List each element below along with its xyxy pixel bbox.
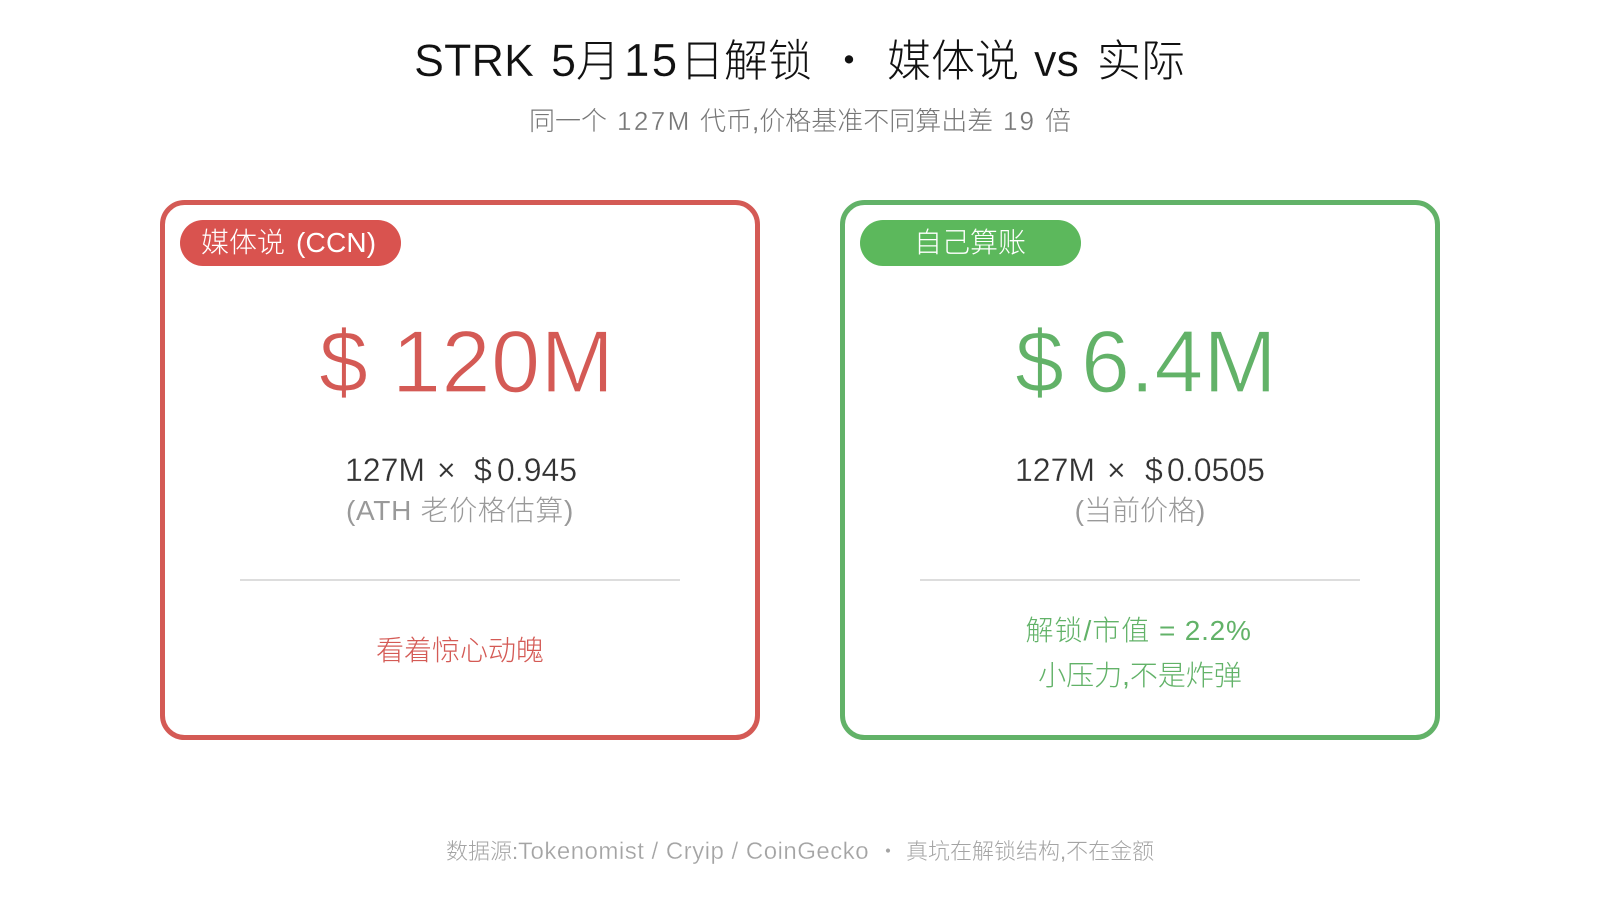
- formula note: own calculation: (当前价格): [1075, 495, 1205, 526]
- panel: media claim: [162, 202, 758, 738]
- subtitle: 同一个: [529, 106, 607, 136]
- title: STRK: [414, 35, 534, 86]
- subtitle: 127M: [617, 106, 692, 136]
- badge: media claim: 媒体说: [201, 227, 285, 258]
- title: 实际: [1097, 37, 1185, 86]
- formula: media claim: ×: [437, 452, 456, 488]
- badge: own calculation: 自己算账: [914, 227, 1026, 258]
- footer source note: Tokenomist / Cryip / CoinGecko: [518, 838, 869, 865]
- footer source note: 数据源:: [446, 839, 518, 864]
- formula: own calculation: ×: [1107, 452, 1126, 488]
- subtitle: 代币,价格基准不同算出差: [700, 106, 993, 136]
- formula: own calculation: 0.0505: [1167, 452, 1265, 488]
- subtitle: 19: [1003, 106, 1036, 136]
- verdict: own calculation: 小压力,不是炸弹: [1038, 660, 1242, 691]
- big number: 6.4M: $: [1015, 312, 1064, 411]
- title: 月: [576, 37, 620, 86]
- big number: 120M: 120M: [392, 312, 615, 411]
- formula: media claim: 127M: [345, 452, 425, 488]
- title: 媒体说: [887, 37, 1019, 86]
- verdict: own calculation: 解锁/市值: [1026, 615, 1150, 646]
- panel border: media claim: [162, 202, 758, 738]
- badge: own calculation: [860, 220, 1081, 266]
- footer source note: ・: [877, 839, 899, 864]
- big number: 6.4M: 6.4M: [1081, 312, 1277, 411]
- badge: media claim: (CCN): [296, 227, 376, 258]
- formula: own calculation: 127M: [1015, 452, 1095, 488]
- panel: own calculation: [842, 202, 1438, 738]
- big number: 120M: $: [319, 312, 368, 411]
- formula: media claim: 0.945: [497, 452, 577, 488]
- badge: media claim: [180, 220, 401, 266]
- verdict: media claim: 看着惊心动魄: [376, 635, 544, 666]
- footer source note: 真坑在解锁结构,不在金额: [906, 839, 1154, 864]
- title: 日解锁: [680, 37, 812, 86]
- panel border: own calculation: [842, 202, 1438, 738]
- verdict: own calculation: [1026, 615, 1252, 691]
- formula: own calculation: $: [1145, 452, 1163, 488]
- title: 5: [551, 35, 576, 86]
- title: vs: [1034, 35, 1079, 86]
- formula: media claim: $: [474, 452, 492, 488]
- subtitle: 倍: [1045, 106, 1071, 136]
- verdict: own calculation: = 2.2%: [1159, 615, 1252, 646]
- title: ・: [827, 37, 871, 86]
- title: 15: [624, 34, 679, 86]
- formula note: media claim: (ATH 老价格估算): [346, 495, 574, 526]
